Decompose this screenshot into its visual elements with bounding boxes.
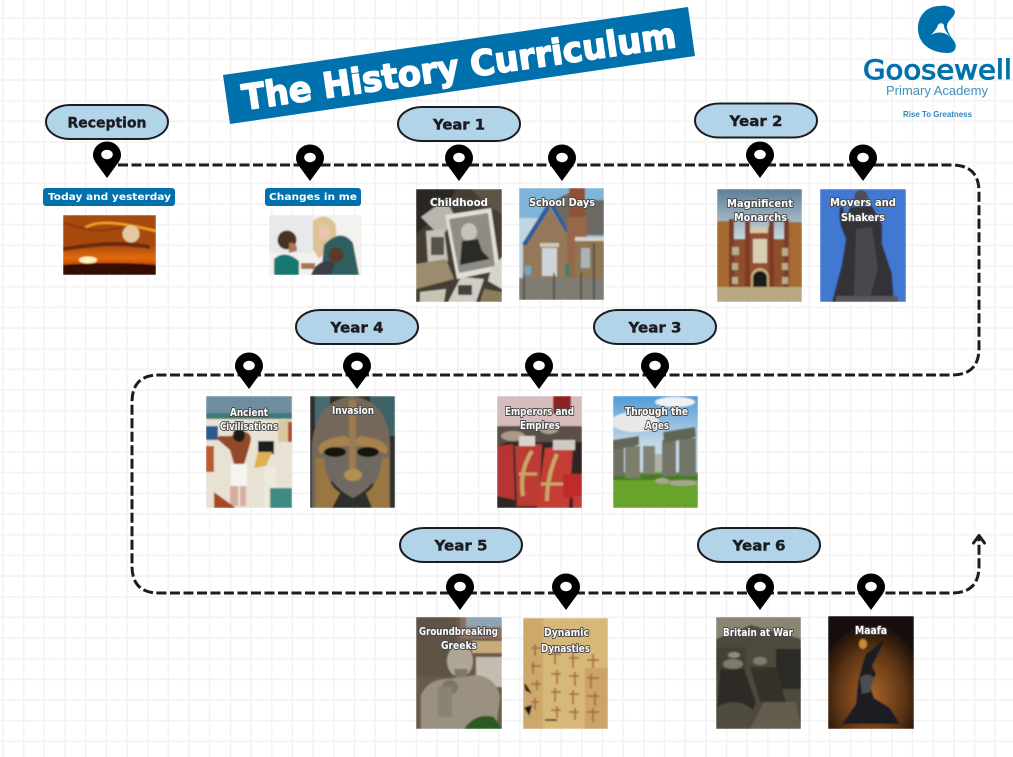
year label: Year 5: Year 5 [433, 538, 488, 554]
topic label: Changes in me [269, 192, 357, 203]
image: Egyptian wall painting [206, 396, 292, 508]
topic: Movers and Shakers [820, 189, 906, 302]
image caption: Civilisations [220, 421, 278, 433]
image: Roman soldiers with shields [497, 396, 582, 508]
year label: Reception [46, 105, 168, 139]
image caption: Ancient [230, 407, 268, 419]
year label: Year 6: Year 6 [731, 538, 786, 554]
year label: Year 4 [296, 310, 418, 344]
image: ancient Chinese script [523, 618, 608, 729]
year label: Year 3 [594, 310, 716, 344]
logo subtitle: Primary Academy [886, 83, 988, 98]
logo name: Goosewell [863, 55, 1012, 86]
image: statue against blue sky [820, 189, 906, 302]
image caption [505, 406, 574, 432]
icon: goose emblem [918, 6, 956, 53]
image caption [727, 198, 793, 224]
topic: Magnificent Monarchs [717, 189, 802, 302]
image caption: Greeks [441, 640, 477, 652]
image caption [541, 627, 590, 655]
image caption: Empires [520, 420, 560, 432]
year label: Year 4: Year 4 [329, 320, 384, 336]
topic label: Today and yesterday [48, 192, 171, 203]
image caption: Shakers [841, 212, 885, 224]
topic: Today and yesterday [43, 188, 175, 275]
year label: Year 3: Year 3 [627, 320, 682, 336]
topic: Groundbreaking Greeks [416, 617, 502, 729]
title text: The History Curriculum [240, 16, 679, 119]
image caption: Childhood [430, 197, 488, 209]
topic: Childhood [416, 189, 502, 302]
image: statue of Socrates [416, 617, 502, 729]
year label: Year 2: Year 2 [728, 114, 782, 130]
image caption [625, 406, 688, 432]
image caption: Dynasties [541, 643, 590, 655]
topic: School Days [519, 188, 604, 300]
timeline route: dashed arrow [118, 165, 984, 593]
image caption: Monarchs [734, 212, 787, 224]
image: sunset with moon [63, 215, 156, 275]
image caption: School Days [529, 197, 595, 209]
year label: Year 5 [400, 528, 522, 562]
topic: Dynamic Dynasties [523, 618, 608, 729]
topic: Invasion [310, 396, 395, 508]
topic: Emperors and Empires [497, 396, 582, 508]
map pins along the route [93, 142, 885, 610]
year label: Year 2 [695, 104, 817, 138]
image: mother with children [269, 215, 362, 275]
image caption [220, 407, 278, 433]
image caption: Movers and [830, 197, 896, 209]
image caption [419, 626, 498, 652]
logo tagline: Rise To Greatness [903, 109, 972, 119]
image caption: Through the [625, 406, 688, 418]
image caption [830, 197, 896, 224]
image caption: Dynamic [544, 627, 589, 639]
topic: Maafa [828, 616, 914, 729]
image: Tudor palace gatehouse [717, 189, 802, 302]
year label: Year 1: Year 1 [432, 118, 485, 134]
topic: Britain at War [716, 617, 801, 729]
image caption: Magnificent [727, 198, 793, 210]
title banner [223, 7, 695, 124]
image caption: Ages [645, 420, 669, 432]
image caption: Invasion [332, 405, 374, 417]
image caption: Maafa [855, 625, 887, 637]
topic: Ancient Civilisations [206, 396, 292, 508]
topic: Through the Ages [611, 396, 698, 508]
image: Stonehenge [613, 396, 698, 508]
year label: Year 1 [398, 107, 520, 141]
year label: Year 6 [698, 528, 820, 562]
topic: Changes in me [265, 188, 362, 275]
year label: Reception: Reception [68, 116, 146, 132]
logo: Goosewell Primary Academy [863, 6, 1012, 119]
